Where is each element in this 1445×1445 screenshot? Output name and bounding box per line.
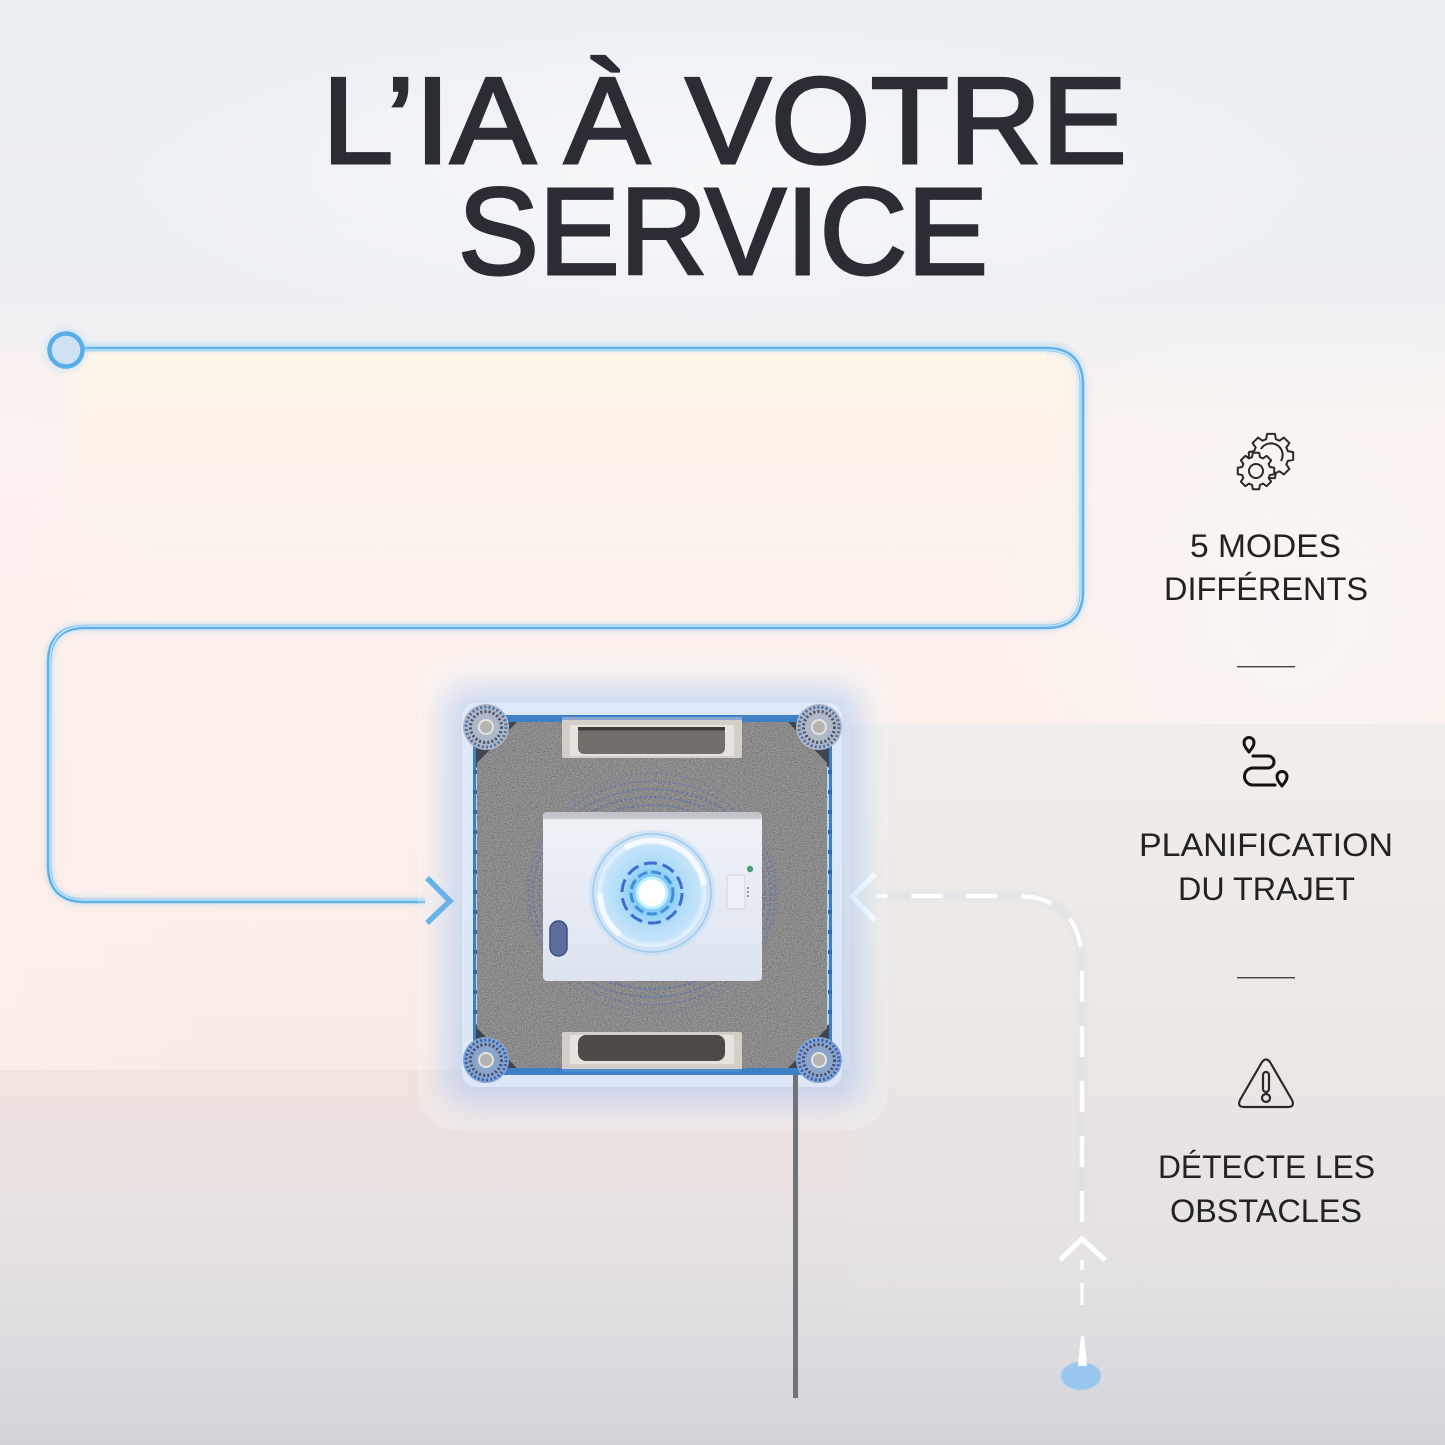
- label: PLANIFICATION: [1139, 827, 1393, 863]
- title: L’IA À VOTRE: [322, 53, 1127, 190]
- label: [1164, 528, 1368, 607]
- power cable: [793, 1075, 798, 1398]
- label: [1158, 1149, 1375, 1229]
- central window: [543, 811, 762, 981]
- icon: route: [1244, 738, 1287, 786]
- divider: [1237, 666, 1295, 667]
- window cleaning robot: [418, 660, 888, 1398]
- label: DÉTECTE LES: [1158, 1149, 1375, 1185]
- blue chassis: [473, 715, 832, 1075]
- feature: obstacle detection: [1158, 1060, 1375, 1229]
- button: [727, 875, 745, 909]
- icon: warning triangle: [1239, 1060, 1293, 1107]
- chevron left: [852, 874, 875, 920]
- oval sensor: [550, 921, 567, 956]
- top track: [562, 717, 742, 758]
- label: 5 MODES: [1190, 528, 1341, 564]
- title: [322, 53, 1127, 301]
- title: SERVICE: [458, 164, 988, 301]
- label: OBSTACLES: [1170, 1193, 1362, 1229]
- label: DU TRAJET: [1178, 871, 1355, 907]
- path start marker: [44, 328, 88, 372]
- halo: [418, 660, 888, 1130]
- lidar sensor: [598, 839, 706, 947]
- label: DIFFÉRENTS: [1164, 571, 1368, 607]
- corner wheels: [463, 704, 842, 1083]
- grey felt pad: [477, 722, 827, 1068]
- feature: 5 modes: [1164, 434, 1368, 607]
- chevron up: [1060, 1239, 1105, 1260]
- bottom track: [562, 1032, 742, 1072]
- status led: [747, 866, 753, 872]
- label: [1139, 827, 1393, 907]
- blue chevron arrow: [427, 878, 450, 923]
- divider: [1237, 977, 1295, 978]
- icon: gears: [1238, 434, 1293, 489]
- white dashed return path: [852, 874, 1105, 1390]
- feature: route planning: [1139, 738, 1393, 907]
- blue cleaning path: [44, 328, 1082, 923]
